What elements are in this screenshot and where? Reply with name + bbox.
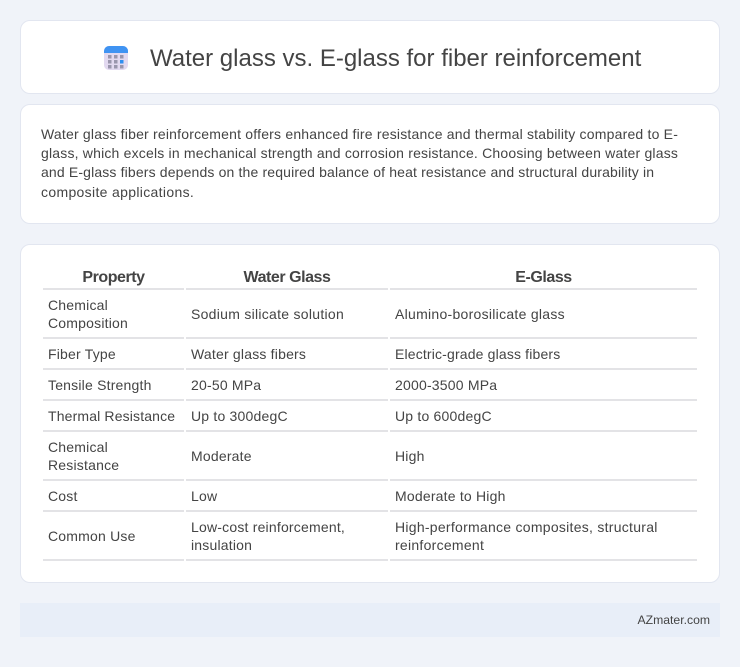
icon: calendar xyxy=(104,46,128,70)
row: thermal resistance: Thermal Resistance xyxy=(48,408,175,424)
summary text xyxy=(41,126,678,200)
comparison table: Up to 300degC xyxy=(191,408,288,424)
row: chemical resistance: Resistance xyxy=(48,457,119,473)
panel: comparison table xyxy=(20,244,720,583)
row: cost: Cost xyxy=(48,488,78,504)
table header: Property xyxy=(82,269,145,286)
comparison table: Sodium silicate solution xyxy=(191,306,344,322)
comparison table: Water glass fibers xyxy=(191,346,306,362)
table header: Water Glass xyxy=(244,269,330,286)
comparison table: High xyxy=(395,448,425,464)
summary text: composite applications. xyxy=(41,184,194,200)
panel: title header xyxy=(20,20,720,94)
row: common use: Common Use xyxy=(48,528,136,544)
row: chemical resistance: Chemical xyxy=(48,439,108,455)
table header: E-Glass xyxy=(515,269,572,286)
comparison table: Moderate to High xyxy=(395,488,506,504)
row: chemical composition: Composition xyxy=(48,315,128,331)
panel: summary xyxy=(20,104,720,224)
comparison table: reinforcement xyxy=(395,537,484,553)
comparison table: High-performance composites, structural xyxy=(395,519,658,535)
footer credit: AZmater.com xyxy=(638,613,710,627)
row: fiber type: Fiber Type xyxy=(48,346,116,362)
row: chemical resistance xyxy=(48,439,119,473)
comparison table: 20-50 MPa xyxy=(191,377,261,393)
comparison table xyxy=(43,269,697,561)
footer bar xyxy=(20,603,720,637)
row: chemical composition: Chemical xyxy=(48,297,108,313)
row: tensile strength: Tensile Strength xyxy=(48,377,152,393)
comparison table: Low-cost reinforcement, xyxy=(191,519,345,535)
comparison table: Moderate xyxy=(191,448,252,464)
comparison table: insulation xyxy=(191,537,252,553)
title: Water glass vs. E-glass for fiber reinforcement xyxy=(150,45,641,72)
table header xyxy=(82,269,572,286)
summary text: and E-glass fibers depends on the required balance of heat resistance and structural durability in xyxy=(41,164,654,180)
comparison table: 2000-3500 MPa xyxy=(395,377,497,393)
summary text: Water glass fiber reinforcement offers enhanced fire resistance and thermal stability compared to E- xyxy=(41,126,678,142)
comparison table: Up to 600degC xyxy=(395,408,492,424)
comparison table: Alumino-borosilicate glass xyxy=(395,306,565,322)
row: chemical composition xyxy=(48,297,128,331)
comparison table: Low xyxy=(191,488,217,504)
summary text: glass, which excels in mechanical strength and corrosion resistance. Choosing between water glass xyxy=(41,145,678,161)
comparison table: Electric-grade glass fibers xyxy=(395,346,560,362)
